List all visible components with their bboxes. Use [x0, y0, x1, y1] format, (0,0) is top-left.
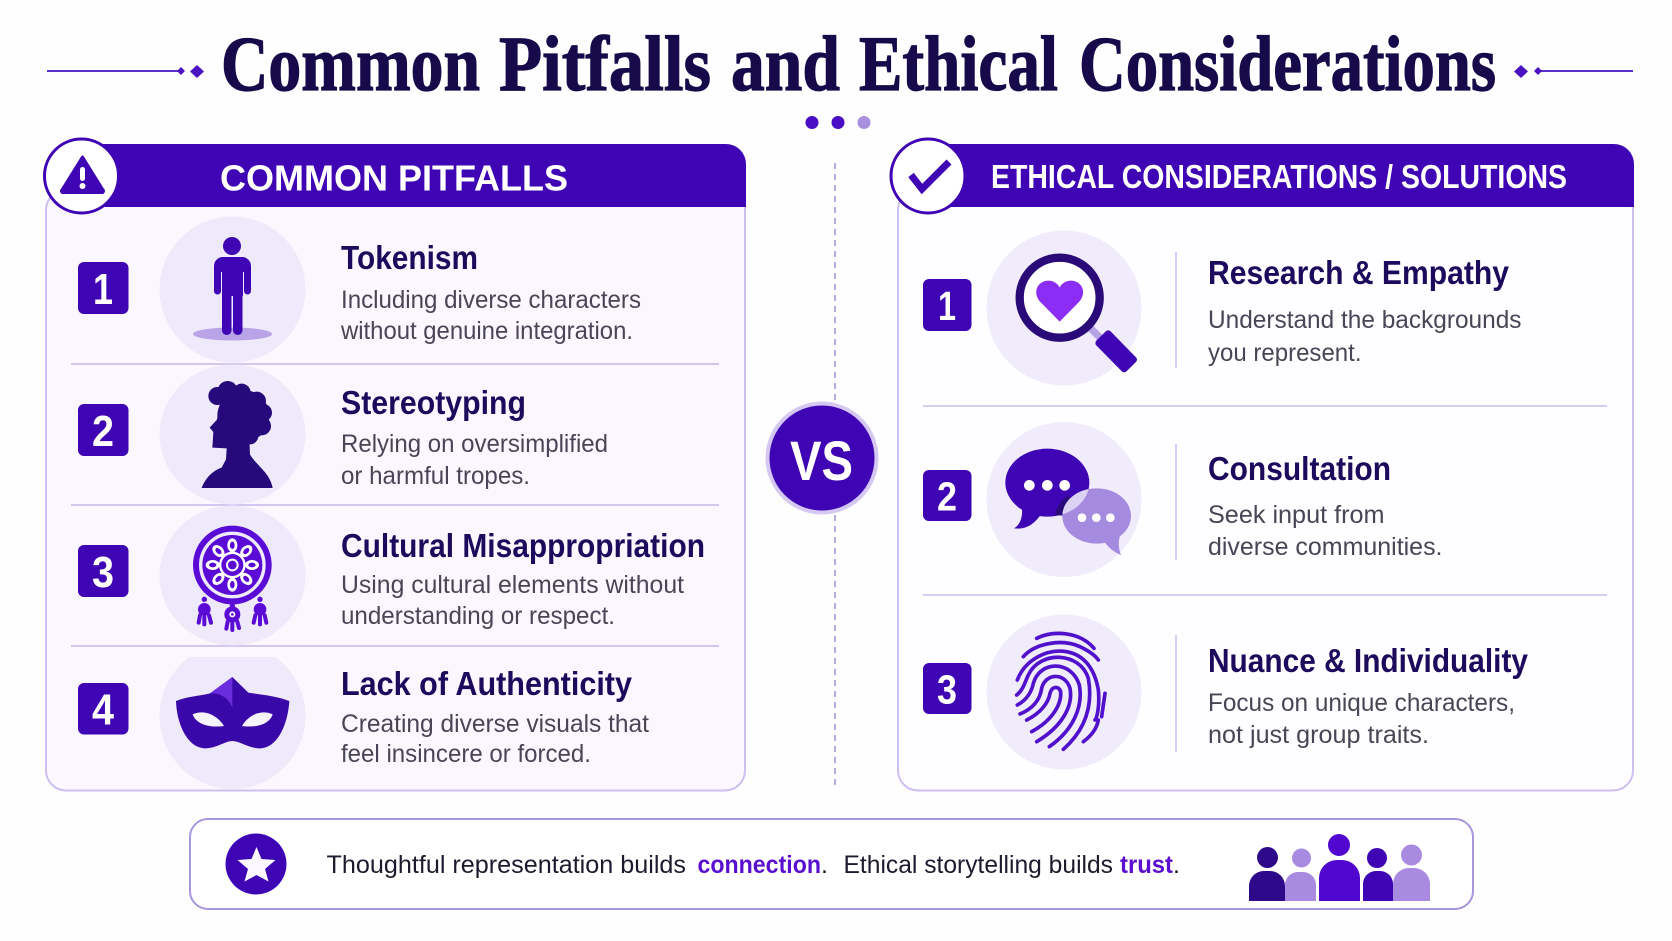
title: Considerations [1079, 20, 1496, 107]
item title: Consultation [1208, 450, 1391, 487]
number badge: 3 [92, 548, 114, 597]
number badge: 1 [938, 283, 956, 329]
item 3: cultural misappropriation [78, 506, 705, 646]
icon: speech bubbles [986, 422, 1142, 577]
callout text: . [1173, 851, 1180, 879]
item description: you represent. [1208, 339, 1362, 367]
item description: feel insincere or forced. [341, 740, 591, 768]
number badge: 2 [92, 407, 114, 456]
number badge: 1 [93, 265, 113, 314]
item description: Focus on unique characters, [1208, 689, 1515, 717]
item description: Seek input from [1208, 501, 1384, 529]
item description: Understand the backgrounds [1208, 306, 1522, 334]
panel: common pitfalls [44, 139, 746, 790]
number badge [923, 470, 972, 521]
item title: Research & Empathy [1208, 254, 1510, 291]
title ornament: right [1514, 65, 1633, 78]
icon: fingerprint [986, 614, 1142, 770]
callout text [326, 851, 1180, 879]
item description: or harmful tropes. [341, 462, 530, 490]
item 2: stereotyping [78, 364, 608, 504]
VS badge [768, 404, 876, 512]
item description: Including diverse characters [341, 286, 641, 314]
header badge: check mark [891, 139, 965, 213]
solution 1: research and empathy [923, 230, 1522, 386]
callout text: connection [698, 851, 821, 879]
icon: star [226, 834, 286, 894]
panel: ethical considerations [891, 139, 1634, 790]
panel header bar [940, 144, 1634, 207]
item description: not just group traits. [1208, 721, 1429, 749]
header badge: warning [44, 139, 118, 213]
item 4: lack of authenticity [78, 643, 649, 789]
item description [1208, 689, 1515, 749]
number badge: 4 [92, 686, 114, 734]
title dots [806, 116, 870, 129]
icon: magnifier with heart [986, 230, 1142, 386]
item title: Tokenism [341, 239, 478, 276]
item description: Creating diverse visuals that [341, 710, 649, 738]
item title: Stereotyping [341, 384, 526, 421]
icon: group of people [1249, 834, 1430, 901]
title: Ethical [859, 20, 1058, 107]
item description: diverse communities. [1208, 533, 1442, 561]
number badge [78, 262, 128, 314]
item title: Lack of Authenticity [341, 665, 633, 702]
icon: dreamcatcher [160, 506, 306, 646]
callout text: . [821, 851, 828, 879]
panel heading: COMMON PITFALLS [220, 158, 568, 198]
title: Pitfalls [499, 20, 711, 107]
item description: Relying on oversimplified [341, 430, 608, 458]
item description [340, 286, 641, 345]
panel header bar [90, 144, 746, 207]
number badge [78, 545, 128, 597]
item description [341, 571, 684, 630]
callout text: trust [1120, 851, 1174, 879]
title: Common [221, 20, 480, 107]
item title: Nuance & Individuality [1208, 642, 1529, 679]
item title: Cultural Misappropriation [341, 527, 705, 564]
item description [1208, 306, 1522, 367]
VS badge: VS [790, 429, 853, 492]
item description: Using cultural elements without [341, 571, 684, 599]
item description: understanding or respect. [341, 602, 615, 630]
item description [1208, 501, 1442, 561]
item 1: tokenism [78, 216, 641, 362]
item description [341, 710, 649, 768]
item description [341, 430, 608, 490]
icon: standing person [160, 216, 306, 362]
panel body [898, 190, 1633, 790]
solution 3: nuance and individuality [923, 614, 1529, 770]
number badge [78, 683, 128, 734]
row dividers [923, 252, 1607, 752]
callout box [190, 819, 1473, 909]
footer callout [190, 819, 1473, 909]
title: and [731, 20, 840, 107]
row dividers [71, 363, 719, 647]
callout text: Thoughtful representation builds [326, 851, 686, 879]
center dashed divider [834, 163, 836, 786]
icon: mask [160, 643, 306, 789]
icon: curly-haired silhouette [160, 364, 306, 504]
number badge: 3 [937, 666, 957, 712]
panel body [46, 190, 745, 790]
title ornament: left [47, 65, 204, 78]
title [221, 20, 1496, 107]
number badge [923, 663, 972, 714]
item description: without genuine integration. [340, 317, 633, 345]
callout text: Ethical storytelling builds [844, 851, 1113, 879]
panel heading: ETHICAL CONSIDERATIONS / SOLUTIONS [991, 158, 1567, 195]
number badge: 2 [937, 474, 957, 520]
solution 2: consultation [923, 422, 1442, 577]
number badge [923, 279, 972, 331]
number badge [78, 404, 128, 456]
